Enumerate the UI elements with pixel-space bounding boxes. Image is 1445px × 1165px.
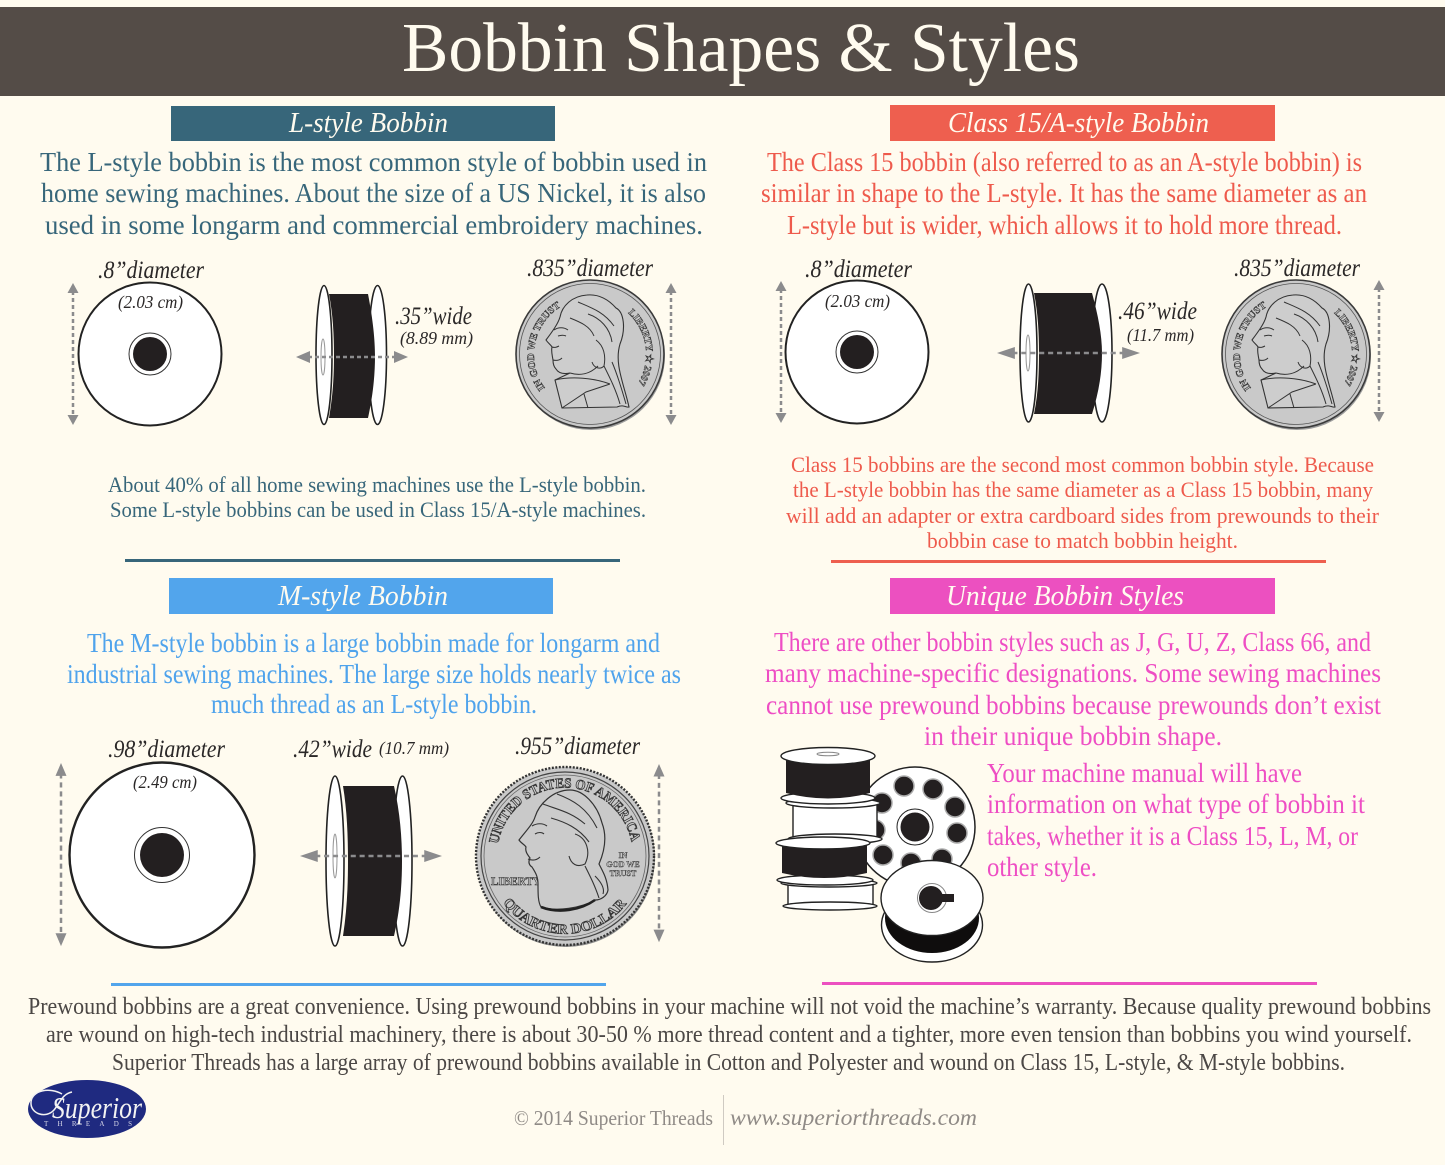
text block: L-style note: Some L-style bobbins can be used in Class 15/A-style machines. <box>110 497 646 522</box>
icon: quarter coin: IN <box>619 851 628 860</box>
icon: nickel coin <box>1222 280 1371 430</box>
label: nickel diameter: .835”diameter <box>1234 255 1360 282</box>
label: Class 15 width <box>1118 298 1197 346</box>
text block: Class 15 description <box>761 147 1367 240</box>
logo: Superior Threads: Superior <box>52 1090 143 1125</box>
text block: L-style note: About 40% of all home sewing machines use the L-style bobbin. <box>108 472 646 497</box>
label: M width <box>293 736 449 763</box>
heading: L-style <box>171 106 555 141</box>
text block: prewound bobbins summary: Superior Threads has a large array of prewound bobbins available in Cotton and Polyester and wound on Class 15, L-style, & M-style bobbins. <box>112 1050 1345 1076</box>
label: L width: .35”wide <box>395 303 472 330</box>
text block: unique styles description: other style. <box>987 852 1097 882</box>
label: Class 15 width: (11.7 mm) <box>1127 325 1194 346</box>
text block: unique styles description: There are other bobbin styles such as J, G, U, Z, Class 66, and <box>774 627 1371 657</box>
text block: Class 15 note: bobbin case to match bobbin height. <box>927 528 1238 553</box>
text block: Class 15 description: The Class 15 bobbin (also referred to as an A-style bobbin) is <box>767 147 1362 177</box>
title banner <box>0 7 1445 96</box>
arrow: Class 15 width <box>997 347 1140 359</box>
arrow: nickel vertical <box>666 283 676 425</box>
icon: Class 15 bobbin front <box>786 280 928 424</box>
label: L diameter: .8”diameter <box>98 257 204 284</box>
title banner: Bobbin Shapes & Styles <box>402 10 1080 87</box>
footer: copyright: © 2014 Superior Threads <box>514 1106 713 1130</box>
text block: unique styles description: cannot use prewound bobbins because prewounds don’t exist <box>766 690 1381 720</box>
icon: L bobbin front <box>78 282 222 426</box>
panel: unique bobbin styles <box>765 578 1381 962</box>
text block: M-style description <box>67 628 681 719</box>
label: M diameter: .98”diameter <box>108 736 225 763</box>
text block: Class 15 description: similar in shape to the L-style. It has the same diameter as an <box>761 178 1367 208</box>
icon: quarter coin: UNITED STATES OF AMERICA <box>488 778 640 842</box>
text block: M-style description: industrial sewing machines. The large size holds nearly twice as <box>67 659 681 689</box>
logo: Superior Threads: THREADS <box>44 1120 132 1128</box>
icon: assorted bobbins <box>776 748 983 962</box>
icon: M bobbin side <box>326 776 412 946</box>
text block: M-style description: The M-style bobbin is a large bobbin made for longarm and <box>87 628 660 658</box>
heading: L-style: L-style Bobbin <box>288 107 448 139</box>
icon: quarter coin: LIBERTY <box>491 874 541 888</box>
icon: L bobbin side <box>316 286 386 424</box>
text block: Class 15 note: Class 15 bobbins are the second most common bobbin style. Because <box>791 452 1374 477</box>
text block: L-style description: used in some longarm and commercial embroidery machines. <box>45 210 703 240</box>
arrow: nickel vertical <box>1374 280 1384 422</box>
arrow: Class 15 vertical <box>776 281 786 423</box>
logo: Superior Threads <box>28 1080 146 1138</box>
text block: Class 15 note: will add an adapter or extra cardboard sides from prewounds to their <box>786 503 1380 528</box>
icon: Class 15 bobbin front: (2.03 cm) <box>825 291 890 312</box>
heading: M-style: M-style Bobbin <box>277 580 448 612</box>
icon: quarter coin: TRUST <box>610 869 637 878</box>
text block: unique styles description: information on what type of bobbin it <box>987 789 1365 819</box>
text block: unique styles description: many machine-specific designations. Some sewing machines <box>765 658 1381 688</box>
text block: L-style description: The L-style bobbin is the most common style of bobbin used in <box>40 147 707 177</box>
text block: M-style description: much thread as an L-style bobbin. <box>211 689 537 719</box>
arrow: M width <box>300 850 442 862</box>
icon: M bobbin front <box>70 762 254 948</box>
heading: M-style <box>169 578 553 614</box>
text block: L-style note <box>108 472 646 522</box>
icon: quarter coin: GOD WE <box>606 860 640 869</box>
label: Class 15 diameter: .8”diameter <box>805 256 912 283</box>
icon: quarter coin: QUARTER DOLLAR <box>504 898 628 934</box>
text block: L-style description: home sewing machines. About the size of a US Nickel, it is also <box>41 178 706 208</box>
text block: unique styles description: takes, whether it is a Class 15, L, M, or <box>987 821 1358 851</box>
text block: Class 15 note <box>786 452 1380 553</box>
label: L width <box>395 303 473 349</box>
text block: unique styles description: in their unique bobbin shape. <box>924 721 1222 751</box>
text block: Class 15 note: the L-style bobbin has the same diameter as a Class 15 bobbin, many <box>793 477 1373 502</box>
arrow: quarter vertical <box>654 764 664 942</box>
label: M width: (10.7 mm) <box>379 738 449 759</box>
label: nickel diameter: .835”diameter <box>527 255 653 282</box>
text block: Class 15 description: L-style but is wider, which allows it to hold more thread. <box>787 210 1342 240</box>
icon: Class 15 bobbin side <box>1020 284 1112 422</box>
panel: M-style bobbin <box>56 578 681 949</box>
footer: website: www.superiorthreads.com <box>730 1105 977 1130</box>
label: quarter diameter: .955”diameter <box>515 733 640 760</box>
text block: L-style description <box>40 147 707 240</box>
heading: unique styles <box>890 578 1275 614</box>
arrow: L width <box>296 351 408 363</box>
icon: M bobbin front: (2.49 cm) <box>133 772 197 793</box>
arrow: L vertical <box>68 283 78 425</box>
arrow: M vertical <box>56 763 66 946</box>
label: L width: (8.89 mm) <box>400 328 473 349</box>
text block: unique styles description: Your machine manual will have <box>987 758 1302 788</box>
heading: Class 15 <box>890 105 1275 141</box>
label: M width: .42”wide <box>293 736 372 763</box>
panel: L-style bobbin <box>40 106 707 522</box>
icon: nickel coin <box>516 280 665 430</box>
label: Class 15 width: .46”wide <box>1118 298 1197 325</box>
panel: Class 15 bobbin <box>761 105 1384 553</box>
heading: unique styles: Unique Bobbin Styles <box>946 580 1184 612</box>
heading: Class 15: Class 15/A-style Bobbin <box>948 107 1209 139</box>
text block: unique styles description <box>765 627 1381 882</box>
text block: prewound bobbins summary <box>28 994 1431 1076</box>
icon: quarter coin <box>474 766 656 947</box>
icon: L bobbin front: (2.03 cm) <box>118 292 183 313</box>
